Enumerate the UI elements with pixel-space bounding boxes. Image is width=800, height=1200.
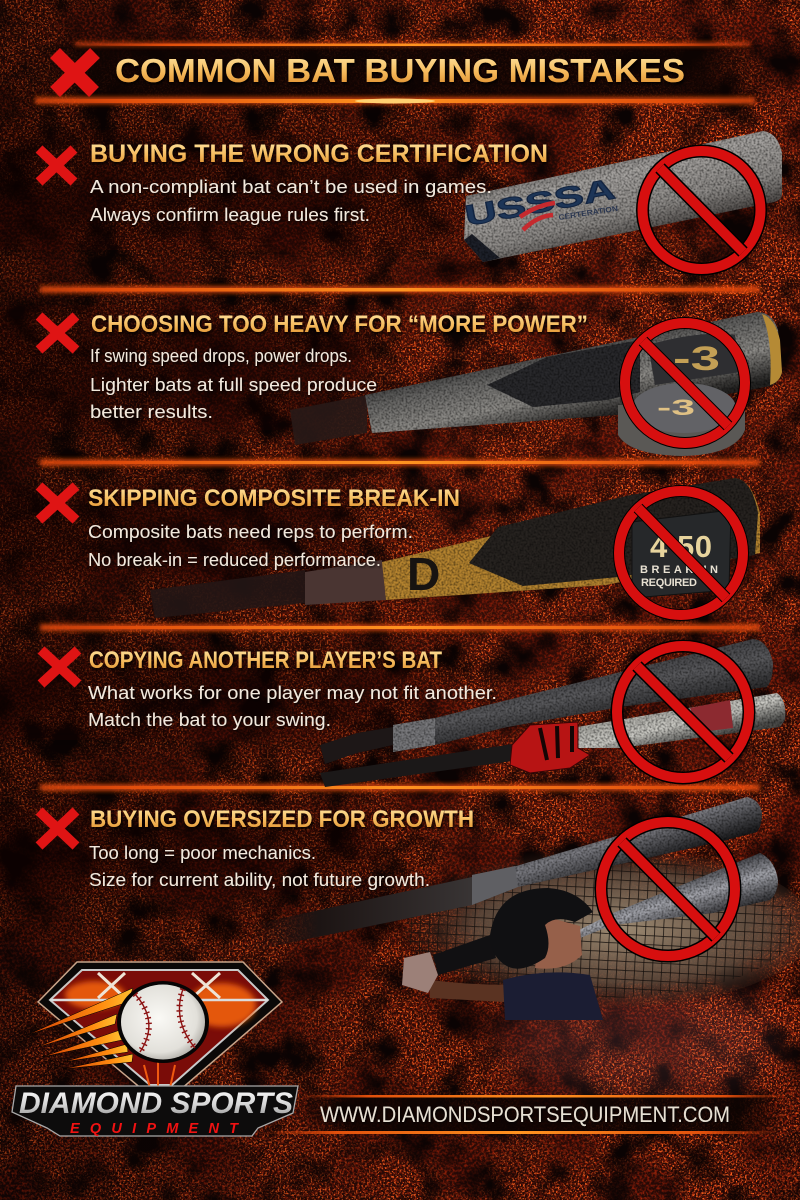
bat: black bat (320, 639, 773, 764)
bat: silver bat (320, 693, 785, 787)
player: young batter (402, 888, 603, 1020)
body text: Composite bats need reps to perform. (88, 522, 413, 542)
batting cage net (385, 848, 800, 1008)
panel: wrong certification: Always confirm league rules first. (90, 205, 370, 225)
website url: WWW.DIAMONDSPORTSEQUIPMENT.COM (320, 1102, 730, 1127)
icon: baseball (117, 981, 209, 1063)
logo text: certification: CERTERATION (558, 204, 619, 222)
logo letter: D (407, 548, 440, 600)
icon: red X (41, 650, 78, 684)
body text: Too long = poor mechanics. (89, 843, 316, 863)
icon: red X (39, 486, 76, 520)
icon: prohibition sign (601, 822, 735, 956)
icon: prohibition sign (617, 646, 749, 778)
hang tag: REQUIRED (641, 577, 697, 589)
footer website bar (265, 1095, 790, 1134)
panel: too heavy: better results. (90, 402, 213, 422)
hang tag: 4 50 (650, 529, 712, 564)
bat: heavy: -3 (657, 395, 695, 420)
label: -3: -3 (673, 340, 720, 378)
bat: long bat (250, 797, 762, 950)
icon: flame streaks (27, 988, 133, 1069)
heading: SKIPPING COMPOSITE BREAK-IN (88, 485, 460, 512)
panel: wrong certification (39, 131, 782, 269)
heading: BUYING OVERSIZED FOR GROWTH (90, 806, 474, 833)
icon: prohibition sign (642, 151, 760, 269)
heading: BUYING THE WRONG CERTIFICATION (90, 140, 548, 168)
icon: red X (39, 149, 74, 182)
icon: red X (39, 811, 76, 846)
heading: CHOOSING TOO HEAVY FOR “MORE POWER” (91, 311, 588, 338)
icon: title red X (55, 53, 95, 92)
title: COMMON BAT BUYING MISTAKES (115, 52, 685, 89)
panel: oversized for growth (39, 797, 800, 1020)
heading: COPYING ANOTHER PLAYER’S BAT (89, 647, 442, 674)
body text: If swing speed drops, power drops. (90, 346, 352, 366)
bat: composite (150, 478, 760, 618)
section dividers (40, 286, 760, 791)
bat: heavy (290, 312, 782, 456)
brand name: DIAMOND SPORTS (19, 1087, 293, 1120)
icon: red batting glove (510, 722, 590, 773)
panel: copying another player: Match the bat to your swing. (88, 710, 331, 730)
logo: Diamond Sports Equipment (12, 962, 298, 1137)
panel: composite break-in: No break-in = reduced performance. (88, 550, 381, 570)
bat: second bat (575, 853, 778, 938)
hang tag: BREAK IN (640, 564, 718, 576)
icon: red X (39, 316, 76, 350)
title band (20, 42, 780, 104)
body text: What works for one player may not fit another. (88, 683, 497, 703)
brand sub-name: EQUIPMENT (70, 1121, 239, 1137)
panel: too heavy (39, 311, 782, 456)
icon: prohibition sign (619, 491, 743, 615)
body text: A non-compliant bat can’t be used in games. (90, 177, 492, 197)
panel: composite break-in (39, 478, 760, 618)
diamond emblem (38, 962, 282, 1090)
panel: oversized for growth: Size for current ability, not future growth. (89, 870, 430, 890)
panel: too heavy: Lighter bats at full speed produce (90, 375, 377, 395)
name banner (12, 1086, 298, 1136)
icon: weight pucks (618, 383, 745, 456)
hang tag (632, 510, 731, 598)
logo text: USSSA: USSSA (462, 173, 618, 233)
bat: USSSA (462, 131, 782, 262)
icon: prohibition sign (625, 323, 745, 443)
panel: copying another player (41, 639, 785, 787)
